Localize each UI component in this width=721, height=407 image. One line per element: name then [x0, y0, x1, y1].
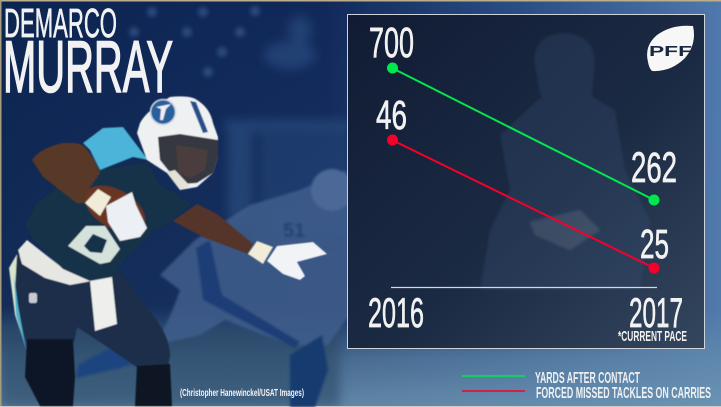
wrist band: [248, 241, 273, 264]
player photo: [9, 96, 327, 406]
legend: [462, 370, 711, 402]
PFF logo: PFF: [649, 43, 692, 60]
title: DEMARCO: [4, 0, 117, 46]
chart: 262: [631, 144, 677, 192]
glove on ball: [106, 192, 147, 241]
faded opposing player: [76, 169, 360, 407]
face: [176, 145, 208, 178]
chart: 2016: [368, 289, 424, 336]
back leg: [25, 339, 75, 406]
chart: [368, 19, 687, 345]
title: MURRAY: [3, 27, 173, 108]
right glove: [267, 242, 327, 280]
side stripe: [9, 254, 25, 345]
right arm: [173, 204, 253, 254]
faded player in panel: [480, 33, 650, 290]
legend: YARDS AFTER CONTACT: [535, 370, 640, 387]
chart: 2017: [629, 289, 683, 336]
chart: 46: [376, 92, 407, 138]
nfl shield: [29, 293, 37, 303]
chart: 25: [640, 221, 669, 267]
title: [3, 0, 173, 108]
PFF logo: [647, 26, 694, 71]
helmet logo: [150, 100, 176, 124]
white waist: [18, 240, 92, 285]
pants: [10, 255, 170, 368]
helmet: [137, 96, 218, 190]
facemask: [158, 134, 218, 184]
faded opposing player: 51: [283, 220, 305, 242]
left arm: [32, 143, 100, 203]
shoulder pad: [83, 127, 148, 170]
jersey: [25, 162, 192, 281]
ball: [77, 176, 153, 242]
wrist tape: [85, 189, 111, 216]
chart: 700: [369, 19, 414, 67]
chart panel: [348, 14, 704, 348]
photo credit: (Christopher Hanewinckel/USAT Images): [180, 388, 304, 399]
towel: [90, 277, 117, 331]
jersey number: [68, 226, 120, 264]
